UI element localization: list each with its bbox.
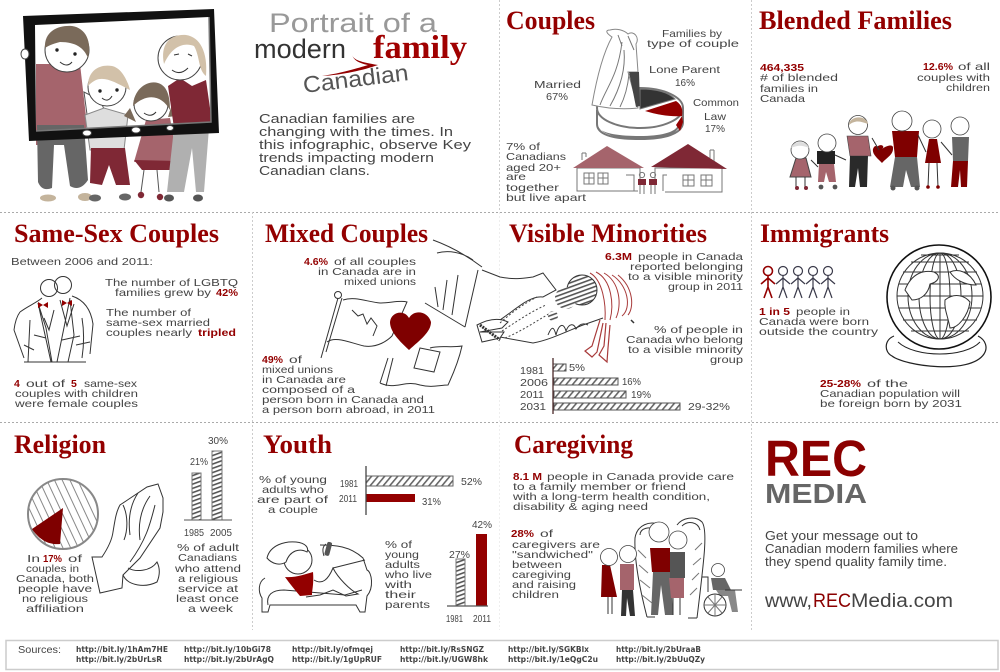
heading: Visible Minorities: Visible Minorities xyxy=(509,219,707,248)
bar chart: service attendance xyxy=(184,435,232,539)
stat: sandwiched caregivers: caregivers are xyxy=(512,539,600,551)
text: sources label: Sources: xyxy=(18,644,61,656)
chart labels: Common xyxy=(693,97,739,109)
heading: Blended Families: Blended Families xyxy=(759,6,952,35)
chart: pie of families by type of couple xyxy=(597,88,683,139)
illustration: snow globe xyxy=(886,245,991,367)
text: no religious affiliation: 17% xyxy=(43,553,63,565)
text: chart caption xyxy=(626,324,744,366)
bar chart: visible minority share: 2011 xyxy=(520,389,544,401)
text: adult attendance caption: service at xyxy=(178,583,238,595)
text: living apart: together xyxy=(506,182,560,194)
stat: share in mixed unions: 4.6% xyxy=(304,256,329,268)
stat: share of couples with children: couples with xyxy=(917,72,990,84)
text: no religious affiliation: In xyxy=(27,553,40,565)
bar chart: couples 1981 and 2011: 2011 xyxy=(339,493,357,505)
bar chart: visible minority share: 19% xyxy=(631,389,651,401)
chart labels xyxy=(534,28,739,135)
stat: sandwiched caregivers: children xyxy=(512,589,559,601)
title: Portrait of a xyxy=(269,8,438,38)
text: source links: http://bit.ly/SGKBlx xyxy=(508,645,589,654)
illustration: two grooms xyxy=(14,276,93,362)
stat: sandwiched caregivers: and raising xyxy=(512,579,576,591)
stat: share of couples with children: children xyxy=(946,82,990,94)
stat: 1 in 5 xyxy=(759,306,879,338)
text: young adults living with parents: who live xyxy=(384,569,432,581)
text: adult attendance caption: least once xyxy=(176,593,239,605)
bar chart: visible minority share: 29-32% xyxy=(688,401,730,413)
text: young adults in a couple: adults who xyxy=(262,484,324,496)
chart labels: 17% xyxy=(705,123,725,135)
stat: sandwiched caregivers: of xyxy=(540,528,553,540)
stat: born in Canada and abroad: mixed unions xyxy=(262,364,333,376)
intro text xyxy=(259,112,472,178)
stat: female couples xyxy=(14,378,138,410)
text: living apart: but live apart xyxy=(506,192,586,204)
bar chart: living with parents: 42% xyxy=(472,519,492,531)
stat: female couples: 5 xyxy=(71,378,77,390)
bar chart: visible minority share: 1981 xyxy=(520,365,544,377)
text: no religious affiliation: people have xyxy=(18,583,92,595)
text: adult attendance caption: % of adult xyxy=(177,542,239,554)
title: Canadian xyxy=(301,59,410,98)
text: adult attendance caption: Canadians xyxy=(178,552,237,564)
heading: Religion: Religion xyxy=(14,430,107,459)
panel: immigrants xyxy=(759,219,991,410)
stat: 8.1 M caregivers: people in Canada provide care xyxy=(547,471,734,483)
illustration: clasped hands with henna and bangles xyxy=(425,240,634,362)
chart labels: Married xyxy=(534,79,581,91)
text: no religious affiliation: of xyxy=(68,553,82,565)
text: young adults in a couple: are part of xyxy=(257,494,328,506)
stats: LGBTQ families and married couples: The number of LGBTQ xyxy=(105,277,238,289)
stat: born in Canada and abroad: 49% xyxy=(262,354,284,366)
text: young adults living with parents: adults xyxy=(385,559,420,571)
stat: 6.3M people: people in Canada xyxy=(638,251,743,263)
chart labels: Families by xyxy=(662,28,723,40)
stat: foreign born by 2031: Canadian population will xyxy=(820,388,960,400)
text: adult attendance caption: who attend xyxy=(174,563,241,575)
bar chart: visible minority share xyxy=(520,358,730,414)
stat: share of couples with children xyxy=(917,61,990,94)
text: young adults living with parents: their xyxy=(385,589,417,601)
stat: sandwiched caregivers: caregiving xyxy=(512,569,571,581)
bar chart: service attendance: 1985 xyxy=(184,527,204,539)
illustration: sandwich generation family xyxy=(600,518,742,618)
stat: born in Canada and abroad xyxy=(262,354,435,416)
chart labels: type of couple xyxy=(647,38,739,50)
text: no religious affiliation: affiliation xyxy=(26,603,84,615)
text: adult attendance caption: a religious xyxy=(178,573,238,585)
text: no religious affiliation: couples in xyxy=(26,563,79,575)
intro text: this infographic, observe Key xyxy=(259,138,472,152)
heading: Caregiving: Caregiving xyxy=(514,430,633,459)
bar chart: living with parents: 1981 xyxy=(446,613,463,625)
text: adult attendance caption xyxy=(174,542,241,615)
title: modern xyxy=(254,34,346,64)
text: source links xyxy=(76,645,705,664)
text: young adults living with parents: % of xyxy=(385,539,412,551)
text: adult attendance caption: a week xyxy=(188,603,234,615)
stats: LGBTQ families and married couples: The number of xyxy=(106,307,191,319)
stat: share of couples with children: 12.6% xyxy=(923,61,954,73)
text: source links: http://bit.ly/2bUuQZy xyxy=(616,655,705,664)
stat: 6.3M people: group in 2011 xyxy=(668,281,743,293)
stat: 8.1 M caregivers: 8.1 M xyxy=(513,471,542,483)
title: family xyxy=(373,30,468,66)
text: source links: http://bit.ly/ofmqej xyxy=(292,645,373,654)
stat: 1 in 5: 1 in 5 xyxy=(759,306,790,318)
stat: sandwiched caregivers: "sandwiched" xyxy=(512,549,593,561)
bar chart: visible minority share: 16% xyxy=(622,376,641,388)
text: between 2006 and 2011: Between 2006 and 2011: xyxy=(11,256,153,268)
stat: 6.3M people: to a visible minority xyxy=(628,271,744,283)
text: source links: http://bit.ly/10bGi78 xyxy=(184,645,271,654)
stat: number of blended families: Canada xyxy=(760,93,805,105)
panel: couples xyxy=(506,6,739,204)
title xyxy=(254,8,468,98)
bar chart: service attendance: 21% xyxy=(190,456,208,468)
panel: youth xyxy=(257,430,492,625)
logo: REC Media: MEDIA xyxy=(765,478,867,509)
stats: LGBTQ families and married couples: same-sex married xyxy=(106,317,210,329)
text: message: Canadian modern families where xyxy=(765,542,958,556)
stat: foreign born by 2031: be foreign born by 2031 xyxy=(820,398,962,410)
stat: 1 in 5: outside the country xyxy=(759,326,879,338)
stat: born in Canada and abroad: a person born abroad, in 2011 xyxy=(262,404,435,416)
illustration: flags and heart xyxy=(321,292,462,386)
stat: born in Canada and abroad: of xyxy=(289,354,302,366)
bar chart: visible minority share: 5% xyxy=(569,362,585,374)
stat: female couples: same-sex xyxy=(84,378,138,390)
illustration: praying hands xyxy=(92,484,163,593)
text: message: Get your message out to xyxy=(765,529,918,543)
chart labels: Law xyxy=(704,111,726,123)
bar chart: living with parents: 27% xyxy=(449,549,470,561)
stat: 8.1 M caregivers xyxy=(512,471,734,513)
bar chart: couples 1981 and 2011: 52% xyxy=(461,476,482,488)
panel: mixed couples xyxy=(262,219,462,416)
stat: number of blended families: families in xyxy=(760,83,818,95)
heading: Immigrants: Immigrants xyxy=(760,219,889,248)
text: no religious affiliation: no religious xyxy=(22,593,88,605)
stat: 8.1 M caregivers: disability & aging need xyxy=(513,501,648,513)
illustration: two houses xyxy=(573,144,727,194)
text: source links: http://bit.ly/1eQgC2u xyxy=(508,655,598,664)
logo: REC Media: REC xyxy=(765,430,867,487)
text: website: REC xyxy=(813,591,851,612)
text: living apart: 7% of xyxy=(506,141,540,153)
chart labels: 67% xyxy=(546,91,568,103)
text: chart caption: % of people in xyxy=(654,324,743,336)
panel: intro xyxy=(21,8,472,202)
illustration: blended family holding hands xyxy=(790,111,969,190)
text: source links: http://bit.ly/1hAm7HE xyxy=(76,645,168,654)
stat: 6.3M people: 6.3M xyxy=(605,251,632,263)
stat: born in Canada and abroad: in Canada are xyxy=(262,374,346,386)
stat: 8.1 M caregivers: to a family member or friend xyxy=(513,481,686,493)
stats: LGBTQ families and married couples xyxy=(105,277,239,339)
text: source links: http://bit.ly/UGW8hk xyxy=(400,655,489,664)
text: no religious affiliation xyxy=(16,553,94,615)
bar chart: living with parents: 2011 xyxy=(473,613,491,625)
heading: Mixed Couples: Mixed Couples xyxy=(265,219,428,248)
intro text: trends impacting modern xyxy=(259,151,434,165)
text: message xyxy=(765,529,958,569)
illustration: bride and groom xyxy=(592,29,640,109)
text: source links: http://bit.ly/2bUraaB xyxy=(616,645,701,654)
text: young adults living with parents xyxy=(384,539,432,611)
illustration: teen on couch with phone xyxy=(259,541,372,612)
text: source links: http://bit.ly/RsSNGZ xyxy=(400,645,485,654)
stat: share in mixed unions: mixed unions xyxy=(344,276,416,288)
stats: LGBTQ families and married couples: families grew by xyxy=(115,287,212,299)
panel: sources xyxy=(6,640,998,670)
text: website xyxy=(764,591,953,612)
text: living apart: are xyxy=(506,171,526,183)
intro text: Canadian families are xyxy=(259,112,415,126)
stat: female couples: 4 xyxy=(14,378,20,390)
icon: five stick figures xyxy=(761,266,835,298)
stats: LGBTQ families and married couples: couples nearly xyxy=(106,327,193,339)
panel: REC Media xyxy=(764,430,958,612)
text: young adults living with parents: with xyxy=(384,579,412,591)
stat: foreign born by 2031: 25-28% xyxy=(820,378,862,390)
text: chart caption: to a visible minority xyxy=(628,344,744,356)
text: source links: http://bit.ly/1gUpRUF xyxy=(292,655,382,664)
panel: same-sex couples xyxy=(11,219,239,410)
text: living apart: Canadians xyxy=(506,151,566,163)
bar chart: visible minority share: 2031 xyxy=(520,401,546,413)
text: young adults in a couple: % of young xyxy=(259,474,327,486)
text: message: they spend quality family time. xyxy=(765,555,947,569)
text: website: www, xyxy=(764,591,812,612)
stat: sandwiched caregivers: between xyxy=(512,559,562,571)
panel: caregiving xyxy=(511,430,742,618)
text: source links: http://bit.ly/2bUrAgQ xyxy=(184,655,274,664)
text: young adults living with parents: parents xyxy=(385,599,430,611)
logo: REC Media xyxy=(765,430,867,509)
text: chart caption: group xyxy=(710,354,743,366)
stat: 8.1 M caregivers: with a long-term health condition, xyxy=(512,491,710,503)
stat: share in mixed unions xyxy=(304,256,416,288)
stat: sandwiched caregivers: 28% xyxy=(511,528,535,540)
bar chart: couples 1981 and 2011 xyxy=(339,466,482,515)
stat: female couples: were female couples xyxy=(14,398,138,410)
stat: female couples: out of xyxy=(26,378,65,390)
text: young adults in a couple: a couple xyxy=(268,504,318,516)
stat: foreign born by 2031 xyxy=(820,378,962,410)
stat: number of blended families: # of blended xyxy=(760,72,838,84)
bar chart: visible minority share: 2006 xyxy=(520,377,548,389)
heading: Youth: Youth xyxy=(263,430,333,459)
bar chart: couples 1981 and 2011: 1981 xyxy=(340,478,358,490)
text: chart caption: Canada who belong xyxy=(626,334,743,346)
intro text: Canadian clans. xyxy=(259,164,370,178)
stat: born in Canada and abroad: composed of a xyxy=(262,384,355,396)
stat: share in mixed unions: in Canada are in xyxy=(318,266,416,278)
stat: female couples: couples with children xyxy=(15,388,138,400)
chart: pie of couples with no religious affiliation xyxy=(28,479,98,549)
intro text: changing with the times. In xyxy=(259,125,453,139)
text: young adults living with parents: young xyxy=(385,549,419,561)
bar chart: couples 1981 and 2011: 31% xyxy=(422,496,441,508)
text: no religious affiliation: Canada, both xyxy=(16,573,94,585)
panel: visible minorities xyxy=(509,219,744,414)
text: living apart: aged 20+ xyxy=(506,162,561,174)
stat: foreign born by 2031: of the xyxy=(867,378,908,390)
stats: LGBTQ families and married couples: tripled xyxy=(198,327,236,339)
stat: 6.3M people: reported belonging xyxy=(630,261,743,273)
text: living apart xyxy=(506,141,586,204)
stat: 6.3M people xyxy=(605,251,744,293)
stat: 1 in 5: Canada were born xyxy=(759,316,869,328)
illustration: family holding a picture frame xyxy=(21,9,219,202)
stat: share of couples with children: of all xyxy=(958,61,990,73)
stat: number of blended families xyxy=(760,62,838,105)
text: young adults in a couple xyxy=(257,474,328,516)
heading: Same-Sex Couples: Same-Sex Couples xyxy=(14,219,219,248)
heading: Couples: Couples xyxy=(506,6,595,35)
bar chart: service attendance: 2005 xyxy=(210,527,232,539)
stat: 1 in 5: people in xyxy=(796,306,850,318)
stat: number of blended families: 464,335 xyxy=(760,62,804,74)
panel: blended families xyxy=(759,6,990,190)
text: source links: http://bit.ly/2bUrLsR xyxy=(76,655,162,664)
text: website: Media.com xyxy=(851,591,953,612)
chart labels: 16% xyxy=(675,77,695,89)
stats: LGBTQ families and married couples: 42% xyxy=(216,287,239,299)
stat: share in mixed unions: of all couples xyxy=(334,256,416,268)
chart labels: Lone Parent xyxy=(649,64,720,76)
panel: religion xyxy=(14,430,241,615)
bar chart: service attendance: 30% xyxy=(208,435,228,447)
bar chart: living with parents xyxy=(446,519,492,625)
stat: born in Canada and abroad: person born in Canada and xyxy=(262,394,424,406)
stat: sandwiched caregivers xyxy=(511,528,600,601)
